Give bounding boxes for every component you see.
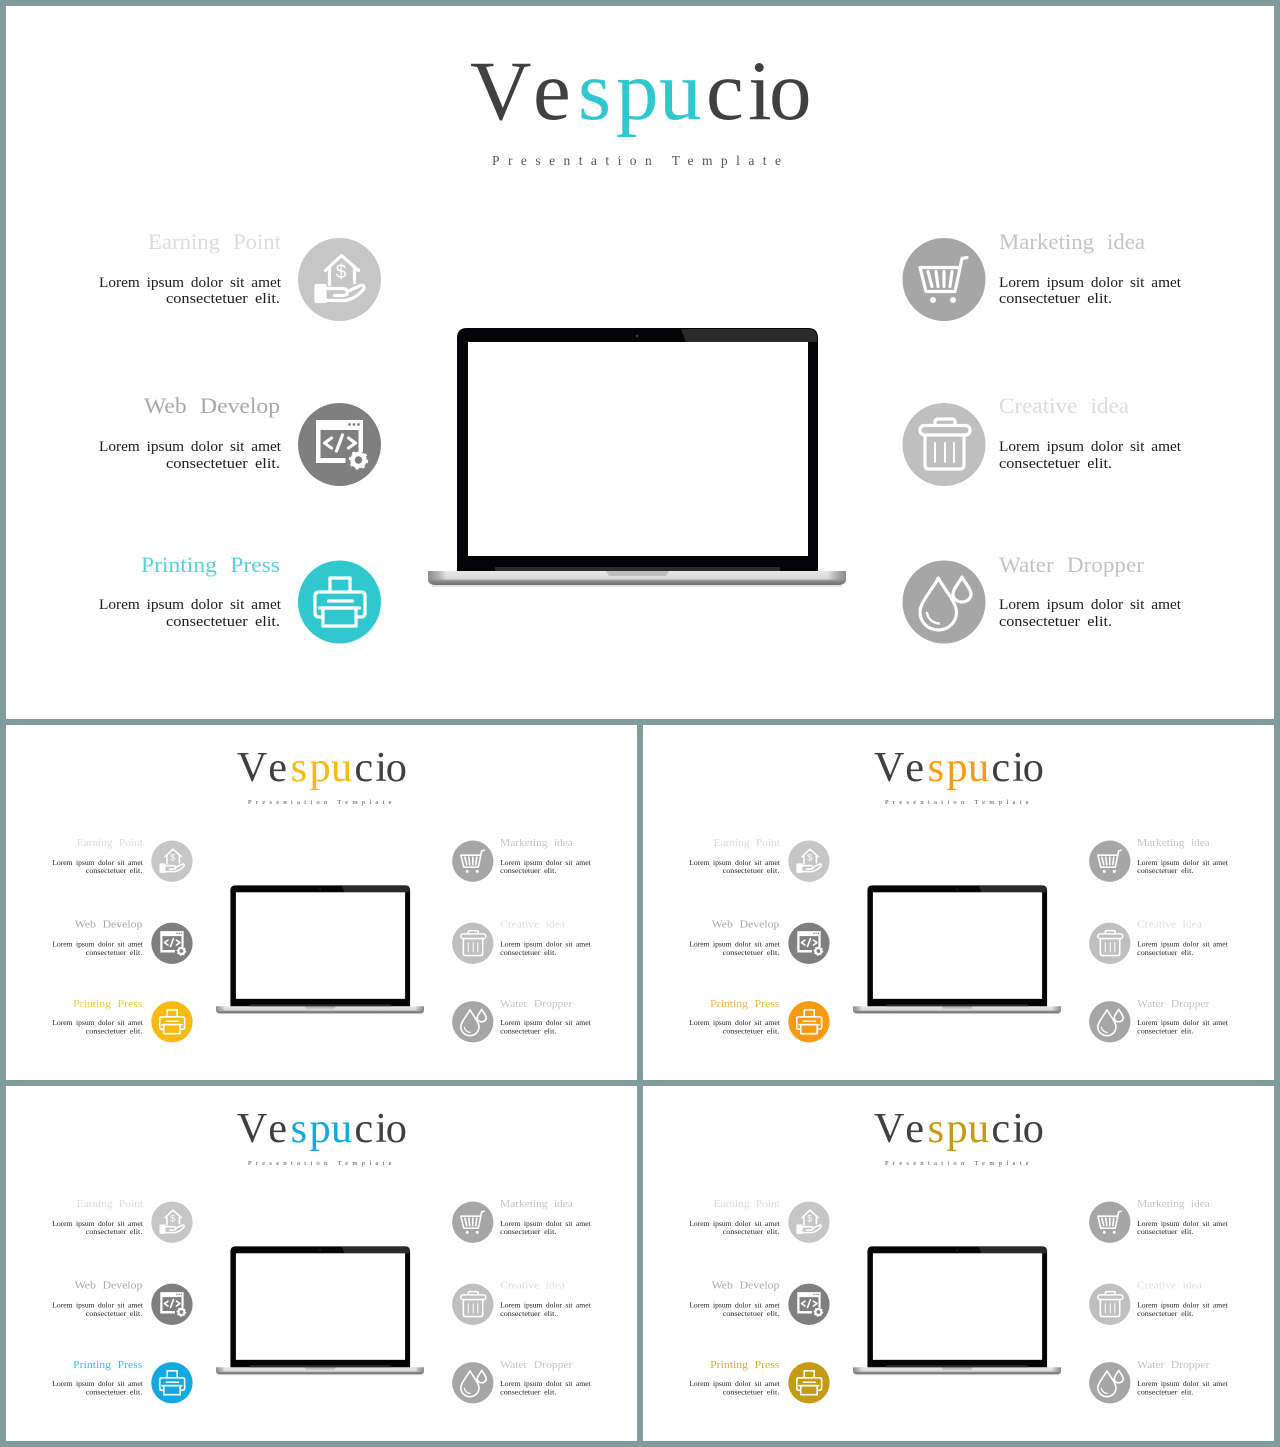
item: Web Develop: consectetuer elit.: [86, 948, 143, 957]
item: Web Develop: consectetuer elit.: [723, 1309, 780, 1318]
item: Creative idea: Lorem ipsum dolor sit amet: [1137, 1301, 1229, 1310]
item: Printing Press: consectetuer elit.: [86, 1027, 143, 1036]
item: Printing Press: Lorem ipsum dolor sit amet: [689, 1379, 781, 1388]
item: Marketing idea: [452, 837, 592, 882]
item: Web Develop: Lorem ipsum dolor sit amet: [99, 439, 282, 455]
item: Web Develop: [99, 393, 381, 486]
item: Earning Point: $: [807, 1213, 813, 1224]
item: Water Dropper: Water Dropper: [500, 998, 573, 1010]
title: spu: [928, 1105, 989, 1152]
item: Creative idea: consectetuer elit.: [500, 1309, 557, 1318]
item: Water Dropper: consectetuer elit.: [1137, 1027, 1194, 1036]
subtitle: Presentation Template: [492, 153, 781, 168]
item: Marketing idea: [902, 229, 1182, 321]
subtitle: Presentation Template: [248, 1160, 392, 1167]
title: Ve: [470, 44, 571, 138]
laptop: [216, 885, 424, 1014]
item: Creative idea: consectetuer elit.: [1137, 1309, 1194, 1318]
item: Earning Point: $: [170, 1213, 176, 1224]
item: Water Dropper: [902, 552, 1182, 644]
item: Marketing idea: Lorem ipsum dolor sit amet: [500, 1219, 592, 1228]
item: Web Develop: Web Develop: [75, 1280, 143, 1292]
title: spu: [291, 744, 352, 791]
item: Earning Point: [52, 1198, 193, 1243]
item: Earning Point: Earning Point: [77, 837, 143, 849]
panel: gold slide: [643, 1086, 1274, 1441]
title: cio: [354, 744, 407, 791]
item: Printing Press: consectetuer elit.: [723, 1027, 780, 1036]
panel: blue slide: [6, 1086, 637, 1441]
title: cio: [991, 744, 1044, 791]
item: Earning Point: Earning Point: [714, 837, 780, 849]
item: Marketing idea: consectetuer elit.: [1137, 866, 1194, 875]
item: Earning Point: [689, 837, 830, 882]
item: Marketing idea: Marketing idea: [1137, 1198, 1210, 1210]
item: Web Develop: [689, 919, 830, 964]
item: Creative idea: Lorem ipsum dolor sit amet: [500, 940, 592, 949]
item: Marketing idea: [1089, 1198, 1229, 1243]
item: Printing Press: [99, 552, 381, 644]
item: Web Develop: [689, 1280, 830, 1325]
item: Earning Point: consectetuer elit.: [86, 866, 143, 875]
item: Earning Point: [52, 837, 193, 882]
item: Creative idea: [1089, 919, 1229, 964]
item: Printing Press: Printing Press: [710, 1359, 779, 1371]
item: Water Dropper: [452, 1359, 592, 1403]
item: Marketing idea: [1089, 837, 1229, 882]
item: Creative idea: consectetuer elit.: [1137, 948, 1194, 957]
item: Printing Press: Lorem ipsum dolor sit amet: [99, 597, 282, 613]
item: Printing Press: [52, 1359, 193, 1403]
item: Water Dropper: consectetuer elit.: [1137, 1388, 1194, 1397]
item: Earning Point: $: [807, 852, 813, 863]
item: Web Develop: Web Develop: [712, 1280, 780, 1292]
item: Printing Press: Lorem ipsum dolor sit amet: [52, 1018, 144, 1027]
subtitle: Presentation Template: [885, 1160, 1029, 1167]
item: Web Develop: Lorem ipsum dolor sit amet: [52, 940, 144, 949]
item: Water Dropper: Lorem ipsum dolor sit amet: [500, 1018, 592, 1027]
item: Water Dropper: Lorem ipsum dolor sit amet: [500, 1379, 592, 1388]
item: Earning Point: Lorem ipsum dolor sit amet: [52, 1219, 144, 1228]
title: Ve: [237, 744, 287, 791]
item: Web Develop: consectetuer elit.: [723, 948, 780, 957]
item: Creative idea: [902, 393, 1182, 486]
item: Marketing idea: Marketing idea: [500, 837, 573, 849]
item: Marketing idea: Lorem ipsum dolor sit amet: [500, 858, 592, 867]
item: Earning Point: consectetuer elit.: [723, 866, 780, 875]
item: Marketing idea: [452, 1198, 592, 1243]
item: Water Dropper: [1089, 998, 1229, 1042]
subtitle: Presentation Template: [885, 799, 1029, 806]
title: cio: [706, 44, 812, 138]
item: Earning Point: [689, 1198, 830, 1243]
item: Marketing idea: Lorem ipsum dolor sit amet: [1137, 1219, 1229, 1228]
item: Web Develop: Lorem ipsum dolor sit amet: [52, 1301, 144, 1310]
item: Earning Point: consectetuer elit.: [166, 291, 280, 307]
item: Marketing idea: Lorem ipsum dolor sit amet: [999, 275, 1182, 291]
title: Ve: [237, 1105, 287, 1152]
item: Water Dropper: Water Dropper: [1137, 1359, 1210, 1371]
laptop: [853, 885, 1061, 1014]
item: Web Develop: Lorem ipsum dolor sit amet: [689, 1301, 781, 1310]
item: Web Develop: [52, 919, 193, 964]
item: Water Dropper: Lorem ipsum dolor sit amet: [999, 597, 1182, 613]
item: Earning Point: Lorem ipsum dolor sit amet: [99, 275, 282, 291]
title: Ve: [874, 744, 924, 791]
item: Earning Point: Earning Point: [148, 229, 281, 254]
item: Earning Point: consectetuer elit.: [86, 1227, 143, 1236]
item: Printing Press: consectetuer elit.: [86, 1388, 143, 1397]
item: Creative idea: Lorem ipsum dolor sit amet: [999, 439, 1182, 455]
item: Water Dropper: Lorem ipsum dolor sit amet: [1137, 1018, 1229, 1027]
item: Water Dropper: consectetuer elit.: [500, 1027, 557, 1036]
item: Water Dropper: Water Dropper: [999, 552, 1145, 577]
item: Creative idea: Creative idea: [1137, 919, 1202, 931]
title: cio: [991, 1105, 1044, 1152]
item: Printing Press: Printing Press: [73, 1359, 142, 1371]
title: spu: [291, 1105, 352, 1152]
panel: yellow slide: [6, 725, 637, 1080]
laptop: [428, 328, 846, 587]
item: Earning Point: $: [336, 262, 347, 283]
subtitle: Presentation Template: [248, 799, 392, 806]
item: Water Dropper: consectetuer elit.: [500, 1388, 557, 1397]
item: Printing Press: Printing Press: [73, 998, 142, 1010]
item: Web Develop: [52, 1280, 193, 1325]
item: Water Dropper: [452, 998, 592, 1042]
panel: main teal slide: [6, 6, 1274, 719]
item: Earning Point: [99, 229, 381, 321]
item: Creative idea: consectetuer elit.: [999, 456, 1112, 472]
item: Water Dropper: Water Dropper: [500, 1359, 573, 1371]
item: Creative idea: Creative idea: [999, 393, 1129, 418]
item: Creative idea: Creative idea: [500, 1280, 565, 1292]
item: Creative idea: Lorem ipsum dolor sit amet: [500, 1301, 592, 1310]
item: Marketing idea: consectetuer elit.: [500, 1227, 557, 1236]
item: Marketing idea: consectetuer elit.: [999, 291, 1112, 307]
title: Ve: [874, 1105, 924, 1152]
item: Earning Point: Earning Point: [714, 1198, 780, 1210]
title: cio: [354, 1105, 407, 1152]
item: Marketing idea: consectetuer elit.: [1137, 1227, 1194, 1236]
item: Printing Press: [52, 998, 193, 1042]
item: Earning Point: Lorem ipsum dolor sit amet: [689, 858, 781, 867]
item: Creative idea: [452, 1280, 592, 1325]
laptop: [853, 1246, 1061, 1375]
item: Printing Press: Lorem ipsum dolor sit amet: [689, 1018, 781, 1027]
item: Creative idea: Creative idea: [500, 919, 565, 931]
item: Creative idea: Creative idea: [1137, 1280, 1202, 1292]
item: Printing Press: [689, 998, 830, 1042]
item: Earning Point: Lorem ipsum dolor sit amet: [52, 858, 144, 867]
item: Marketing idea: Marketing idea: [999, 229, 1145, 254]
item: Marketing idea: consectetuer elit.: [500, 866, 557, 875]
item: Water Dropper: Lorem ipsum dolor sit amet: [1137, 1379, 1229, 1388]
item: Web Develop: Web Develop: [75, 919, 143, 931]
item: Printing Press: consectetuer elit.: [723, 1388, 780, 1397]
item: Marketing idea: Marketing idea: [1137, 837, 1210, 849]
item: Printing Press: Printing Press: [141, 552, 280, 577]
item: Printing Press: Lorem ipsum dolor sit amet: [52, 1379, 144, 1388]
item: Water Dropper: consectetuer elit.: [999, 614, 1112, 630]
item: Marketing idea: Marketing idea: [500, 1198, 573, 1210]
item: Web Develop: consectetuer elit.: [86, 1309, 143, 1318]
item: Earning Point: consectetuer elit.: [723, 1227, 780, 1236]
item: Marketing idea: Lorem ipsum dolor sit amet: [1137, 858, 1229, 867]
item: Web Develop: Web Develop: [144, 393, 280, 418]
item: Creative idea: [1089, 1280, 1229, 1325]
item: Creative idea: consectetuer elit.: [500, 948, 557, 957]
item: Creative idea: Lorem ipsum dolor sit amet: [1137, 940, 1229, 949]
item: Web Develop: Web Develop: [712, 919, 780, 931]
item: Printing Press: consectetuer elit.: [166, 614, 280, 630]
item: Earning Point: Earning Point: [77, 1198, 143, 1210]
laptop: [216, 1246, 424, 1375]
item: Earning Point: Lorem ipsum dolor sit amet: [689, 1219, 781, 1228]
item: Printing Press: Printing Press: [710, 998, 779, 1010]
title: spu: [578, 44, 702, 138]
panel: orange slide: [643, 725, 1274, 1080]
item: Water Dropper: Water Dropper: [1137, 998, 1210, 1010]
item: Printing Press: [689, 1359, 830, 1403]
item: Water Dropper: [1089, 1359, 1229, 1403]
item: Creative idea: [452, 919, 592, 964]
title: spu: [928, 744, 989, 791]
item: Web Develop: consectetuer elit.: [166, 456, 280, 472]
item: Web Develop: Lorem ipsum dolor sit amet: [689, 940, 781, 949]
item: Earning Point: $: [170, 852, 176, 863]
